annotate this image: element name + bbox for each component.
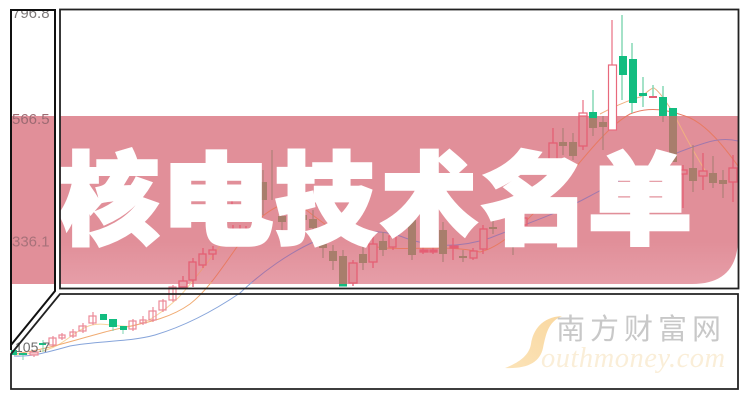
axis labels: 566.5 — [12, 111, 50, 128]
watermark domain: outhmoney.com — [541, 343, 726, 374]
candlesticks above band — [579, 15, 677, 130]
title: 单 — [588, 146, 692, 258]
axis labels: 336.1 — [12, 234, 50, 250]
title: 电 — [161, 147, 273, 258]
title: 核 — [59, 146, 159, 258]
candlesticks lower left (rising) — [30, 285, 176, 357]
frame: main chart panel — [60, 10, 738, 288]
watermark logo — [505, 313, 726, 374]
title: 术 — [381, 145, 477, 257]
axis label: lowest price: 105.7 — [15, 339, 50, 355]
watermark chinese name: 南方财富网 — [556, 313, 726, 346]
axis labels: 796.8 — [12, 5, 50, 22]
icon: swoosh S — [505, 316, 562, 368]
axis labels — [12, 5, 50, 250]
title: 技 — [275, 146, 375, 258]
candlesticks inside band: rising — [179, 116, 737, 287]
candlesticks inside band: falling — [259, 116, 727, 286]
frame: lower chart panel — [11, 294, 738, 389]
frame: left axis panel — [11, 10, 55, 350]
pink banner band — [11, 116, 738, 284]
title — [59, 145, 692, 258]
candlesticks lower left (falling) — [11, 314, 127, 360]
moving average lines — [14, 88, 738, 356]
title: 名 — [482, 147, 590, 258]
